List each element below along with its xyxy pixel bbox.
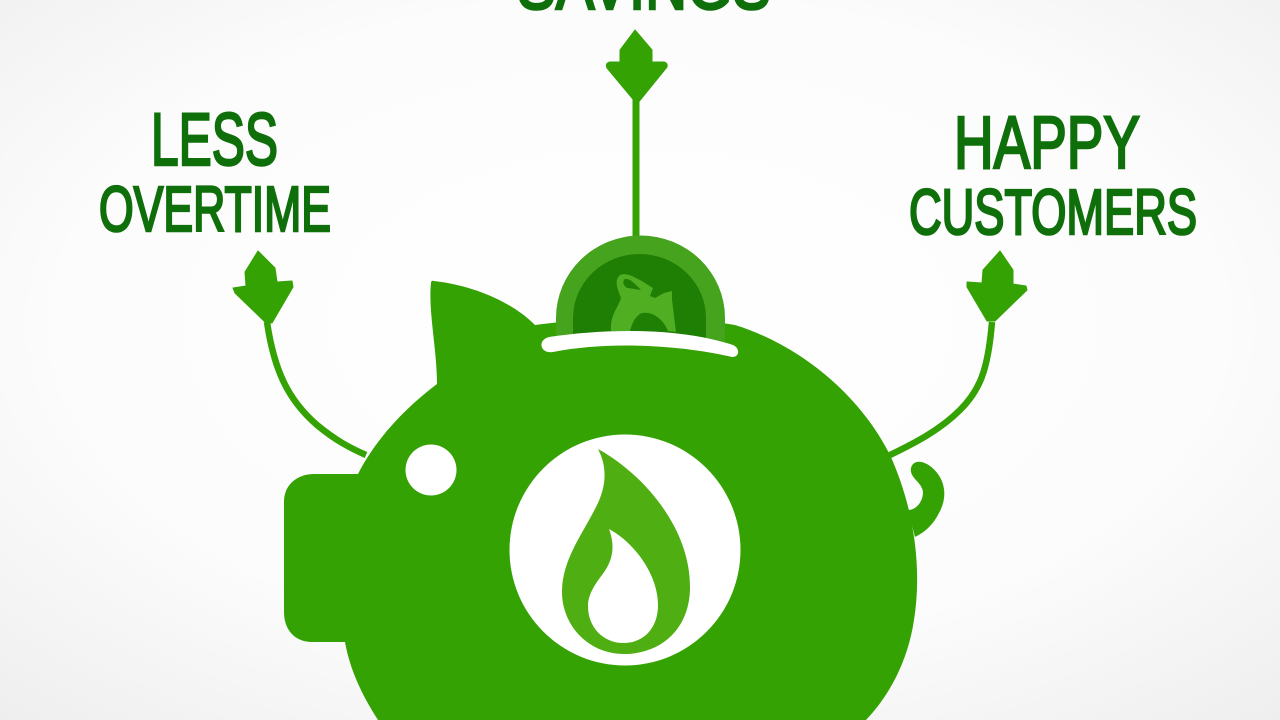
coin slot [541,331,738,357]
label: happy customers [909,101,1197,248]
pig eye [406,444,456,496]
arrow: up to less overtime [233,251,366,455]
pig tail [908,462,944,537]
icon: coin emblem [611,274,676,332]
coin [556,236,725,342]
label: happy customers: HAPPY [954,101,1140,184]
pig body [284,281,917,720]
emblem circle [510,434,740,666]
icon: flame [562,449,690,654]
label: less overtime: LESS [151,98,278,181]
arrow: up to happy customers [888,251,1027,456]
label: less overtime: OVERTIME [99,173,331,245]
label: less overtime [99,98,331,245]
arrow: up to savings [606,30,667,238]
